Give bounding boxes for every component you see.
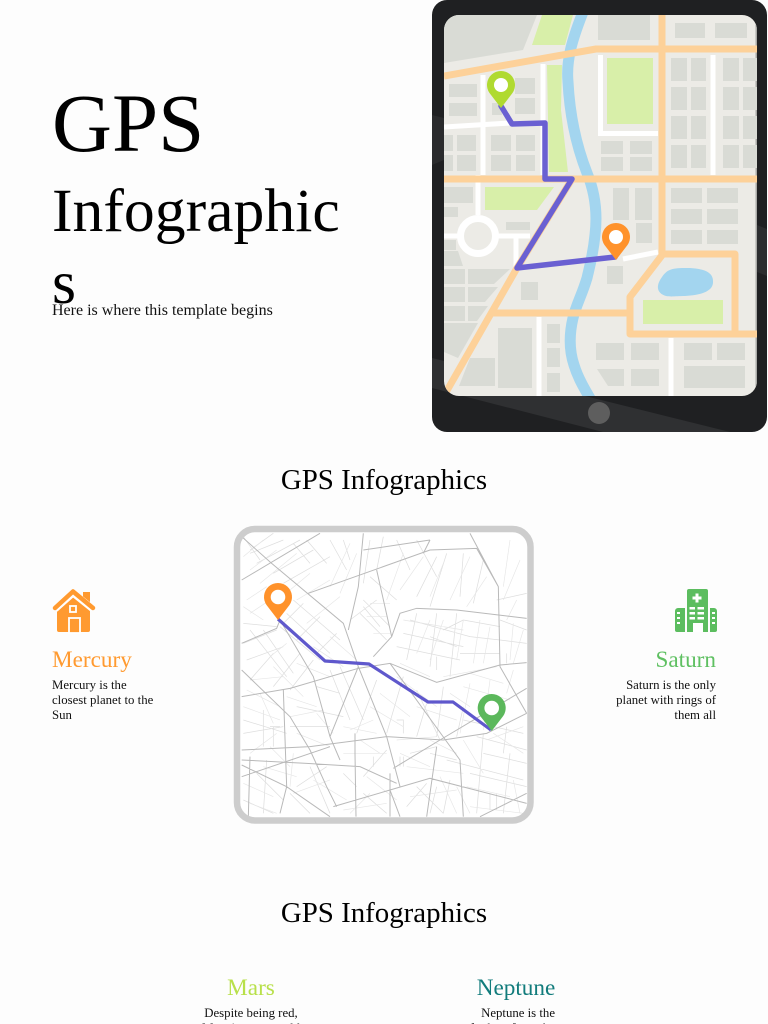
- icon: house: [55, 592, 93, 633]
- panel: Saturn: [616, 589, 717, 722]
- Mercury description: Sun: [52, 708, 73, 722]
- pin: green start: [487, 71, 515, 108]
- tablet with navigation map: [432, 0, 767, 432]
- panel: Mars: [202, 975, 301, 1024]
- Neptune description: Neptune is the: [481, 1006, 555, 1020]
- street network: [242, 533, 527, 817]
- tablet body: [432, 0, 767, 432]
- title: [52, 77, 340, 317]
- panel: city map with route: [237, 529, 531, 821]
- city blocks: [444, 15, 757, 392]
- pin: green destination: [478, 694, 506, 731]
- Saturn description: them all: [674, 708, 716, 722]
- Neptune description: [470, 1006, 555, 1024]
- route line: [501, 106, 615, 268]
- Mercury heading: Mercury: [52, 647, 132, 673]
- Saturn description: [616, 678, 717, 722]
- Mercury description: closest planet to the: [52, 693, 154, 707]
- Saturn description: Saturn is the only: [626, 678, 717, 692]
- map background: [237, 529, 531, 821]
- panel: Mercury: [52, 592, 154, 722]
- main roads: [444, 15, 757, 394]
- home button: [588, 402, 610, 424]
- pin: orange destination: [602, 223, 630, 260]
- Neptune heading: Neptune: [477, 975, 555, 1001]
- tablet map screen: [444, 12, 757, 400]
- section heading: GPS Infographics: [281, 464, 487, 496]
- title: GPS: [52, 77, 204, 169]
- roundabout: [460, 218, 496, 254]
- Mercury description: Mercury is the: [52, 678, 127, 692]
- section heading: GPS Infographics: [281, 897, 487, 929]
- river: [568, 12, 596, 400]
- icon: hospital: [675, 589, 717, 632]
- Saturn description: planet with rings of: [616, 693, 717, 707]
- Mars description: Despite being red,: [204, 1006, 298, 1020]
- route line: [278, 619, 491, 730]
- white streets: [444, 55, 713, 396]
- panel: Neptune: [470, 975, 555, 1024]
- map frame: [237, 529, 530, 820]
- lake: [658, 268, 713, 296]
- parks: [485, 15, 723, 324]
- pin: orange start: [264, 583, 292, 620]
- Saturn heading: Saturn: [655, 647, 716, 673]
- subtitle text: Here is where this template begins: [52, 302, 273, 319]
- title: Infographic: [52, 177, 340, 245]
- title: s: [52, 249, 76, 317]
- Mars heading: Mars: [227, 975, 275, 1001]
- Mercury description: [52, 678, 154, 722]
